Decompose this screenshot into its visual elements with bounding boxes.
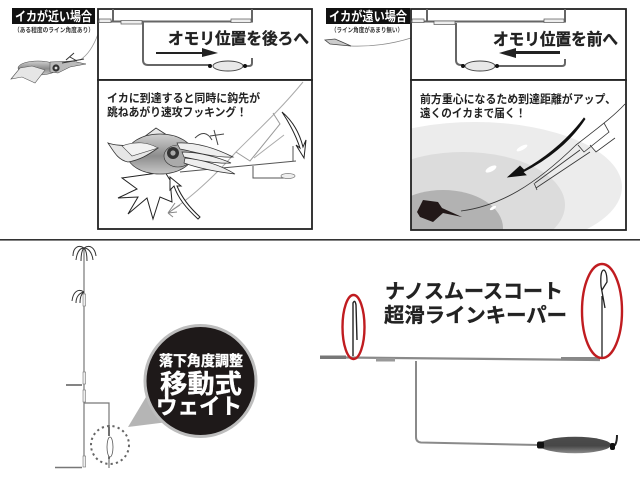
highlight: left keeper ring [342,295,364,359]
label: squid near heading: イカが近い場合 [15,9,92,24]
label: squid near heading: （ある程度のライン角度あり） [14,25,94,34]
illustration: product arm [320,270,617,453]
callout: movable weight: 移動式 [160,369,242,399]
label: squid far heading [326,8,410,34]
rig: line and hooks [168,82,303,217]
arrow: cast direction [508,118,585,177]
text: hooking description [107,91,260,119]
arrow: hook rising [170,177,200,219]
illustration: full rig diagram [55,246,113,468]
water ripple rings [412,122,622,230]
icon: impact burst [118,172,172,219]
callout ring: dotted highlight [91,426,129,464]
label: squid far heading: （ライン角度があまり無い） [331,25,403,34]
arrow: weight moves forward [499,48,560,58]
icon: small squid on line [11,34,98,83]
icon: distant squid on line [325,38,411,46]
heading: オモリ位置を後ろへ [168,29,309,48]
icon: top jig barbs [73,246,96,261]
heading: nano smooth coat: ナノスムースコート [385,281,563,303]
panel: near, quick hooking [98,80,312,229]
callout: movable weight [128,326,256,436]
highlight: right keeper ring [582,264,622,358]
divider [0,239,640,241]
illustration: squid silhouette [417,200,462,222]
icon: weight in rig [107,425,113,459]
illustration: large squid [108,128,235,174]
heading: nano smooth coat [384,281,567,327]
heading: nano smooth coat: 超滑ラインキーパー [384,304,567,327]
callout: movable weight: 落下角度調整 [159,352,243,370]
rig: weight toward front [411,9,566,71]
label: squid far heading: イカが遠い場合 [329,9,407,24]
text: distance description [420,92,616,120]
text: distance description: 前方重心になるため到達距離がアップ、 [420,92,616,106]
arrow: hook swing [282,112,306,158]
text: distance description: 遠くのイカまで届く！ [420,106,526,120]
icon: sinker weight [537,435,617,453]
rig: weight toward rear [98,9,253,71]
arrow: weight moves back [156,48,218,57]
icon: right line keeper [601,270,607,358]
text: hooking description: イカに到達すると同時に鈎先が [107,91,260,105]
callout: movable weight: ウェイト [156,394,242,419]
panel: far, weight position [411,9,626,80]
icon: left line keeper [353,301,357,356]
panel: far, distance gain [410,79,627,231]
heading: オモリ位置を前へ [493,30,618,49]
label: squid near heading [12,8,95,34]
rig: cast line and hook [461,104,625,211]
panel: near, weight position [98,9,312,80]
text: hooking description: 跳ねあがり速攻フッキング！ [107,105,247,119]
icon: lower jig barbs [72,290,84,303]
